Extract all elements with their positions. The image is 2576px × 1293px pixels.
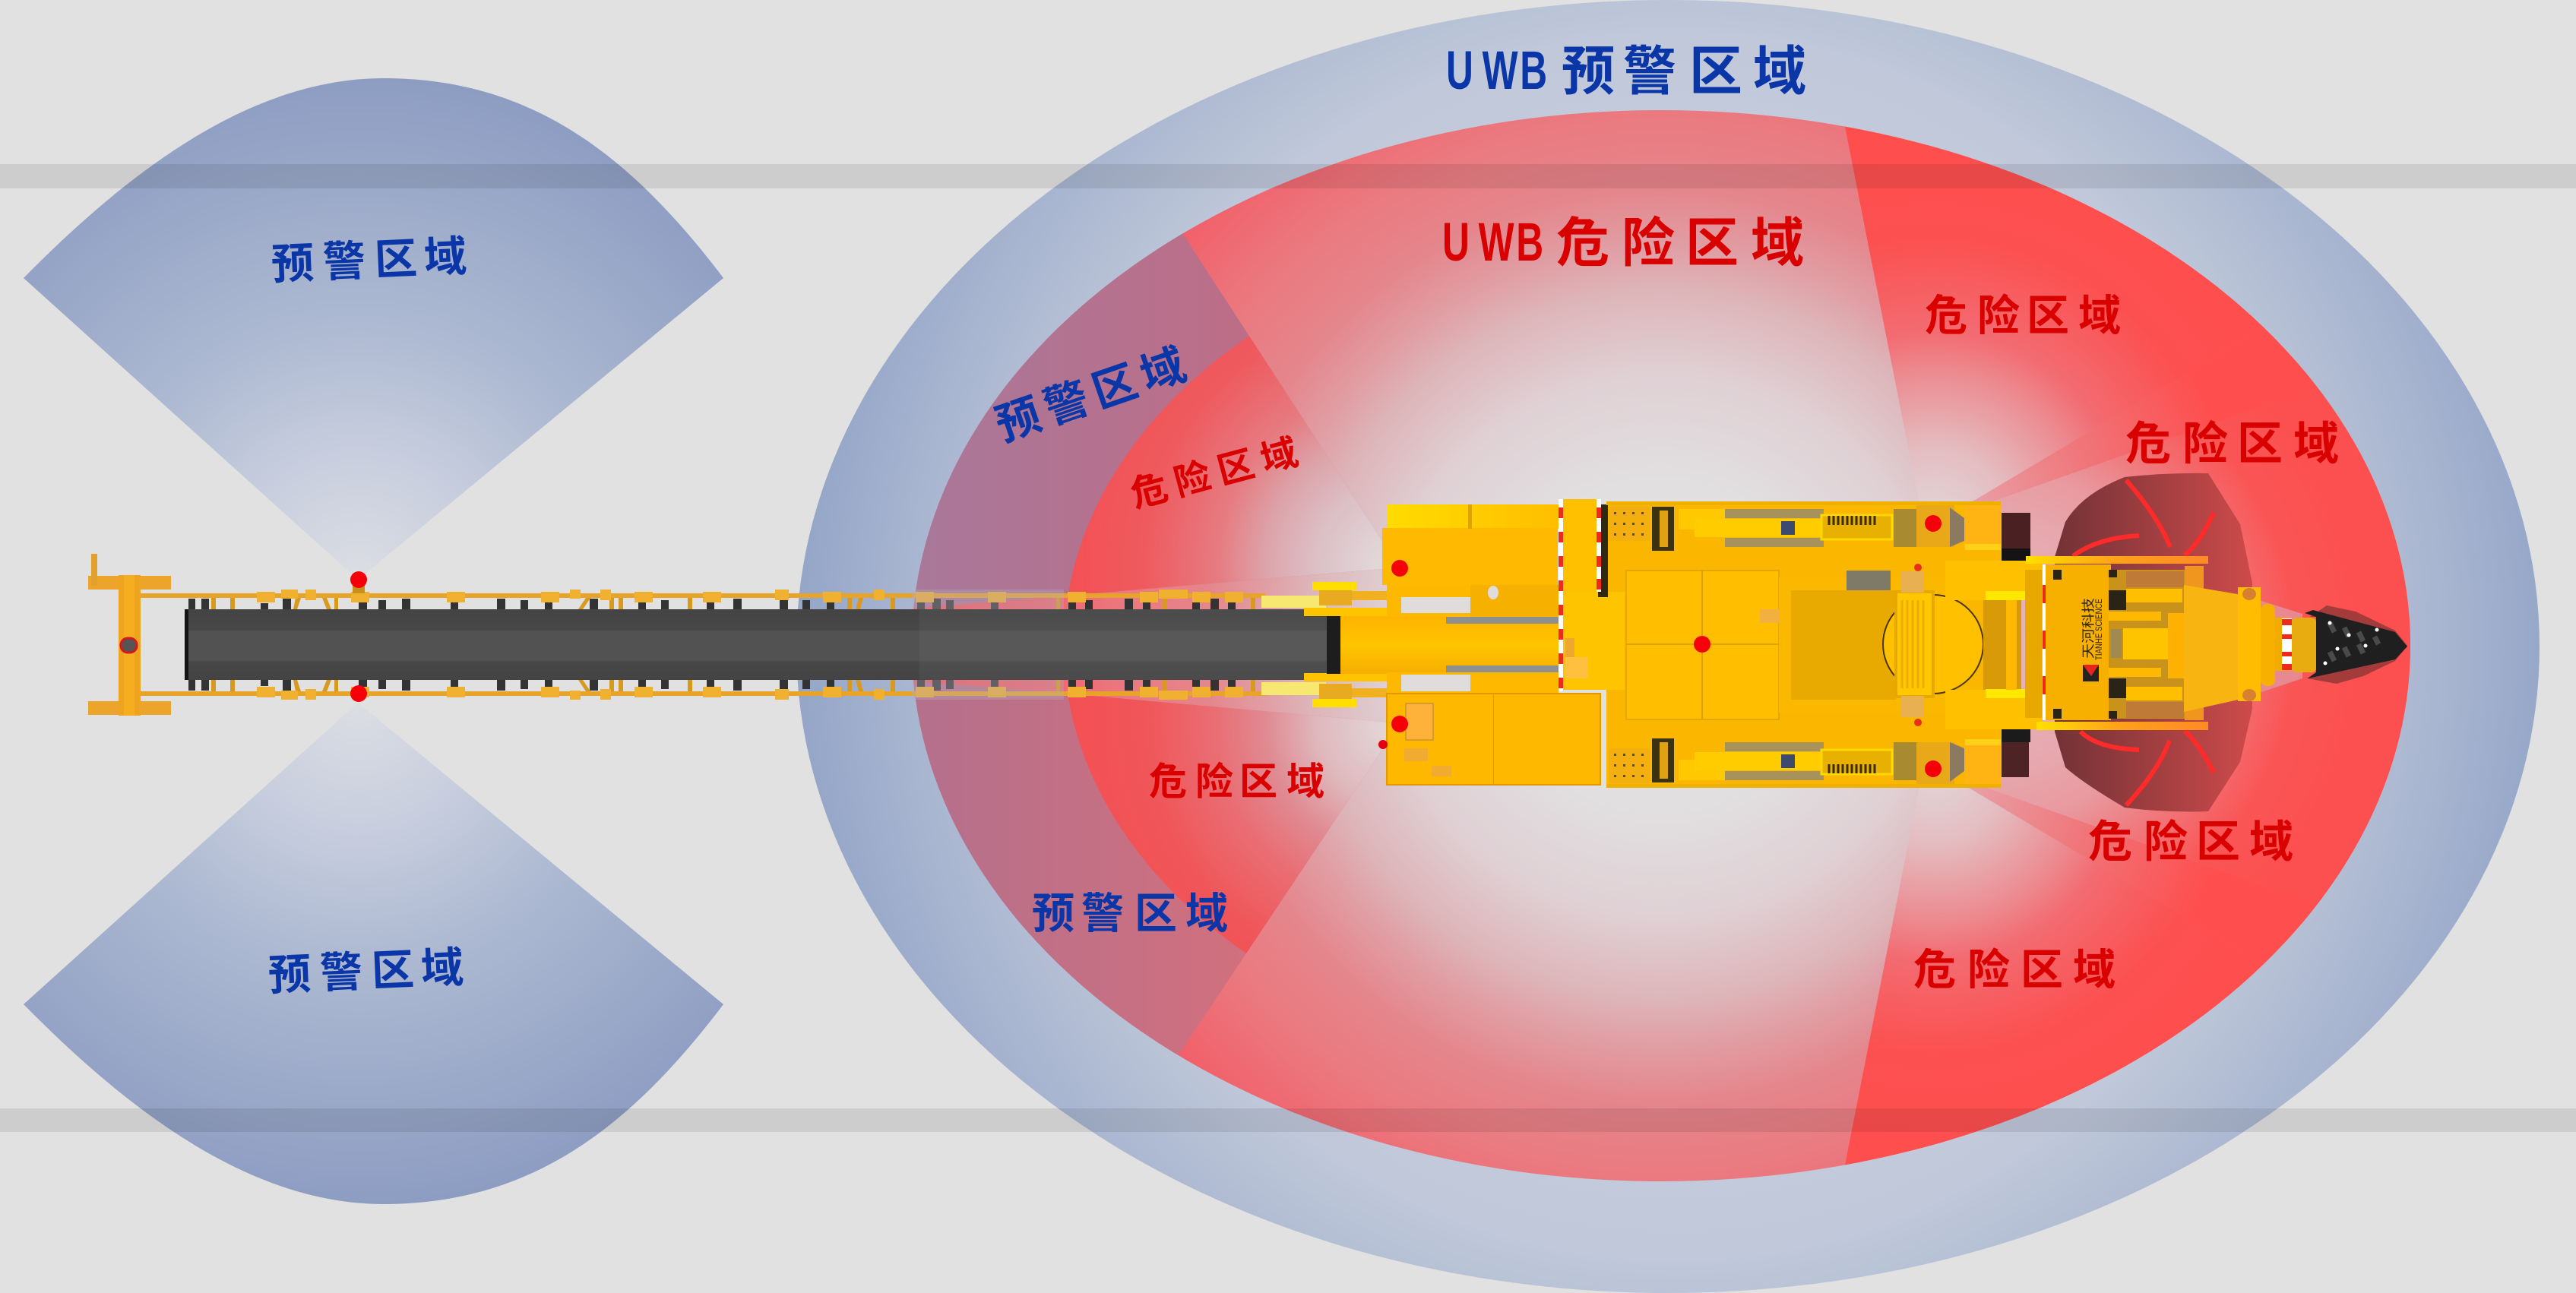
sensor dots on conveyor	[350, 571, 367, 702]
brand mark: TIANHE SCIENCE	[2093, 599, 2104, 660]
heading: UWB danger zone	[1442, 212, 1804, 273]
heading: UWB danger zone: 危险区域	[1556, 213, 1804, 273]
sensor dots on machine	[1378, 515, 1941, 777]
label: lower left danger sector: 危险区域	[1149, 760, 1324, 803]
warning stripes	[1559, 499, 1601, 691]
warning sector: upper left	[913, 234, 1382, 609]
conveyor tail frame	[88, 554, 171, 716]
danger sector: top right	[1845, 126, 2264, 501]
label: bottom left warning fan: 预警区域	[267, 943, 464, 1000]
heading: UWB warning zone: UWB	[1446, 40, 1547, 100]
yoke	[1945, 561, 2043, 729]
UWB danger ellipse	[912, 110, 2410, 1181]
label: upper left warning sector: 预警区域	[989, 340, 1192, 450]
cutter drum	[2305, 605, 2407, 684]
danger zone: right of machine	[1987, 387, 2410, 905]
front frame	[2026, 556, 2238, 730]
label: top right danger sector: 危险区域	[1925, 292, 2121, 340]
brand mark	[2081, 598, 2104, 681]
conveyor idlers and rails	[133, 590, 1265, 700]
UWB warning ellipse	[796, 0, 2540, 1293]
danger sector: upper right	[1973, 328, 2317, 501]
rear deck and radiator	[1779, 571, 1983, 717]
heading: UWB warning zone: 预警区域	[1562, 42, 1806, 101]
upper left tank	[1382, 504, 1559, 585]
danger sector: upper left	[1068, 336, 1382, 593]
heading: UWB warning zone	[1446, 40, 1806, 101]
danger sector: lower left	[1068, 696, 1386, 953]
label: upper right danger sector: 危险区域	[2125, 419, 2339, 469]
heading: UWB danger zone: UWB	[1442, 212, 1543, 272]
warning fan: bottom left	[24, 703, 723, 1204]
track assembly top and bottom	[1606, 501, 2001, 788]
label: lower left warning sector: 预警区域	[1032, 890, 1228, 937]
label: lower right danger sector: 危险区域	[2088, 817, 2293, 867]
central panel	[1626, 571, 1779, 719]
brand mark: 天河科技	[2081, 598, 2096, 659]
warning fan: top left	[24, 78, 723, 580]
danger sector: bottom right	[1845, 788, 2264, 1165]
road strip bottom	[0, 1108, 2576, 1132]
machine rear link	[1261, 582, 1561, 707]
road strip top	[0, 164, 2576, 188]
label: bottom right danger sector: 危险区域	[1913, 946, 2116, 994]
machine main body	[1387, 499, 2001, 785]
lower left tank	[1387, 694, 1600, 785]
label: top left warning fan: 预警区域	[271, 232, 467, 289]
danger sector: lower right	[1969, 788, 2317, 963]
cutting blade shield	[2055, 473, 2252, 811]
label: upper left danger sector: 危险区域	[1127, 432, 1302, 516]
conveyor belt	[185, 609, 1332, 680]
rear crawler tracks	[2002, 513, 2030, 777]
cutter head neck	[2184, 585, 2316, 712]
warning tint over rails	[912, 590, 1064, 700]
warning sector: lower left	[913, 681, 1386, 1055]
